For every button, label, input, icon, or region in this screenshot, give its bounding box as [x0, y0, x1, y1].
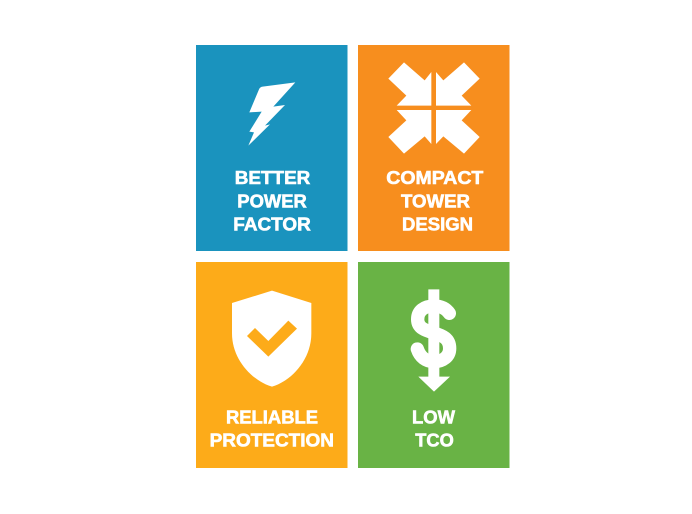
- heading: compact tower design: [386, 168, 483, 235]
- heading: low tco: LOW: [412, 408, 455, 428]
- heading: reliable protection: [210, 408, 334, 451]
- heading: reliable protection: PROTECTION: [210, 431, 334, 451]
- icon: lightning bolt: [248, 82, 295, 146]
- icon: four inward arrows: [388, 62, 480, 154]
- panel: compact tower design: [358, 45, 510, 251]
- heading: better power factor: [233, 168, 311, 235]
- heading: reliable protection: RELIABLE: [226, 408, 318, 428]
- heading: low tco: TCO: [415, 431, 454, 451]
- icon: dollar sign with down arrow: [417, 289, 450, 392]
- heading: compact tower design: DESIGN: [402, 215, 473, 235]
- heading: compact tower design: TOWER: [401, 191, 470, 211]
- icon: shield with check mark: [232, 291, 311, 387]
- panel: reliable protection: [196, 262, 348, 468]
- heading: better power factor: FACTOR: [233, 215, 311, 235]
- heading: low tco: [412, 408, 455, 451]
- heading: compact tower design: COMPACT: [386, 168, 483, 188]
- heading: better power factor: POWER: [237, 191, 307, 211]
- panel: low tco: [358, 262, 510, 468]
- heading: better power factor: BETTER: [235, 168, 310, 188]
- panel: better power factor: [196, 45, 348, 251]
